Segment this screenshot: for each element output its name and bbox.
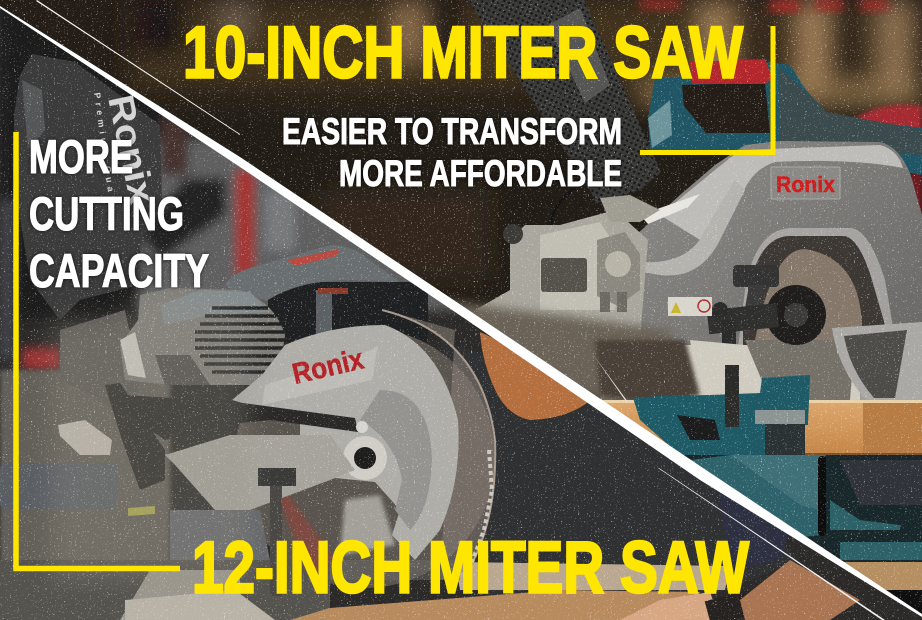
text: benefits of 12-inch saw: MORE (29, 130, 133, 183)
text: benefits of 12-inch saw: CAPACITY (29, 244, 209, 297)
blade, hub and lower guard (684, 265, 922, 400)
top handle (225, 245, 400, 300)
dusty left side of saw (0, 310, 330, 620)
red tools at top (640, 0, 888, 12)
saw blade below guard (235, 328, 495, 588)
bare forearm (480, 332, 588, 420)
handle red grip (287, 249, 340, 266)
motor housing with vent (120, 288, 285, 385)
bottom wood board (290, 560, 860, 620)
saw handle teal and red grip (648, 59, 922, 175)
dust collection bag: Ronix (100, 91, 163, 207)
dark apron backdrop (440, 340, 800, 600)
dust collection bag: Premium Qua (92, 92, 116, 193)
text: benefits of 12-inch saw (29, 130, 209, 297)
dusty lower area (448, 296, 675, 400)
arm sleeve (468, 0, 661, 203)
text: benefits of 12-inch saw: CUTTING (29, 187, 184, 240)
lower saw base (660, 455, 922, 590)
teal fence and clamp (633, 365, 810, 456)
dust collection bag (14, 54, 163, 320)
saw interior behind handle (268, 282, 428, 342)
arm in foreground (770, 545, 880, 610)
saw silver housing (600, 141, 922, 420)
thin accent line top (36, 0, 240, 135)
Ronix logo on blade guard: Ronix (289, 343, 367, 391)
blurred workshop background shelf (122, 0, 922, 276)
yellow bracket: 10-inch callout (640, 26, 773, 152)
thin accent line middle (592, 353, 628, 403)
heading: 12-inch miter saw: 12-INCH MITER SAW (192, 528, 749, 608)
left mechanism (475, 188, 660, 340)
laser warning label (668, 297, 712, 316)
blurred workshop wall (0, 0, 470, 370)
heading: 10-inch miter saw: 10-INCH MITER SAW (183, 12, 743, 94)
text: benefits of 10-inch saw (282, 111, 622, 194)
silver guard (232, 325, 459, 560)
red cloth (852, 102, 922, 128)
thin accent line bottom (658, 468, 885, 620)
transparent blade guard (382, 310, 495, 580)
Ronix badge (771, 167, 840, 199)
wood beam (600, 400, 922, 456)
yellow bracket: 12-inch callout (16, 132, 180, 568)
dark pivot arm and rails (105, 383, 368, 596)
text: benefits of 10-inch saw: MORE AFFORDABLE (339, 153, 622, 194)
dust haze (50, 290, 250, 580)
text: benefits of 10-inch saw: EASIER TO TRANSFORM (282, 111, 622, 152)
blade opening (738, 228, 892, 400)
Ronix badge: Ronix (776, 172, 836, 197)
